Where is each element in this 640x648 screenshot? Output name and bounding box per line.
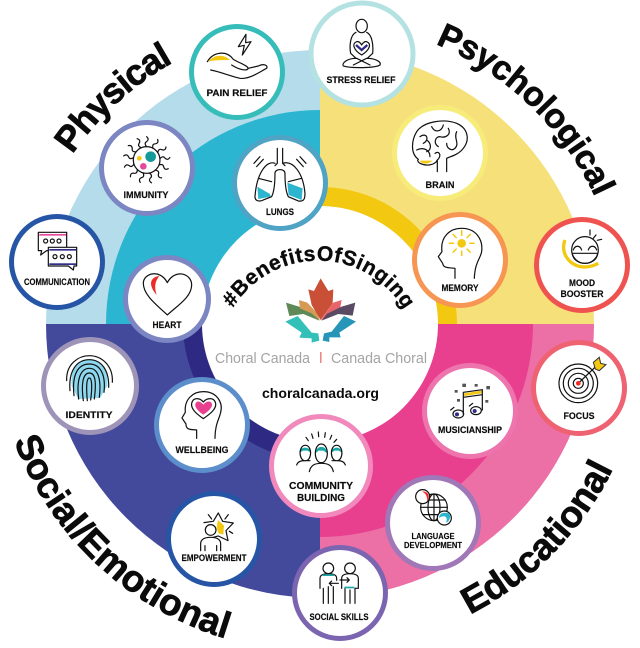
badge: Stress Relief [311,3,413,105]
badge: Focus [534,342,624,434]
badge: Community Building [272,416,370,516]
badge: Language Development: DEVELOPMENT [404,540,463,550]
quadrant: Educational [320,324,594,598]
badge: Focus: FOCUS [564,411,594,422]
badge: Lungs: LUNGS [266,207,294,218]
badge: Identity: IDENTITY [66,410,113,421]
badge: Community Building: COMMUNITY [289,480,353,492]
badge: Wellbeing [156,380,248,470]
badge: Communication [12,216,102,308]
heading: Educational: Educational [459,458,612,614]
icon: person with star [201,513,233,551]
badge: Pain Relief: PAIN RELIEF [206,88,268,99]
organisation name: Choral Canada [215,350,311,367]
hashtag heading: #BenefitsOfSinging [223,246,413,310]
heading: Physical: Physical [53,40,172,153]
icon: speech bubbles [38,232,77,270]
icon: hand with lightning bolt [207,34,267,78]
quadrant: Psychological [320,50,594,324]
badge: Musicianship: MUSICIANSHIP [438,425,503,436]
icon: globe with speech bubbles [416,490,451,525]
heading: Social/Emotional: Social/Emotional [16,434,232,638]
heading: Psychological: Psychological [437,23,617,196]
badge: Memory: MEMORY [442,283,479,294]
badge: Pain Relief [192,26,282,118]
icon: fingerprint [67,356,112,401]
icon: laughing face [564,230,602,267]
badge: Wellbeing: WELLBEING [176,445,228,456]
badge: Empowerment: EMPOWERMENT [182,553,247,564]
badge: Social Skills: SOCIAL SKILLS [310,612,368,623]
badge: Communication: COMMUNICATION [24,277,90,288]
website: choralcanada.org [262,385,379,401]
badge: Heart: HEART [152,320,182,331]
badge: Empowerment [168,494,260,584]
badge: Mood Booster [536,220,628,310]
badge: Heart [126,258,208,340]
badge: Language Development: LANGUAGE [412,531,455,541]
badge: Immunity: IMMUNITY [124,190,169,201]
badge: Language Development [388,478,478,568]
badge: Brain [394,108,486,198]
icon: virus cell [123,137,170,183]
logo: maple leaf [285,278,356,343]
badge: Mood Booster: BOOSTER [560,289,604,300]
icon: target and arrow [559,357,606,403]
badge: Lungs [234,138,326,228]
badge: Community Building: BUILDING [297,492,345,504]
icon: brain [412,121,467,172]
icon: lungs [254,148,306,201]
badge: Musicianship [424,366,516,456]
badge: Brain: BRAIN [426,180,455,191]
badge: Immunity [102,122,192,214]
badge: Memory [414,214,506,306]
badge: Stress Relief: STRESS RELIEF [326,75,396,86]
organisation name: Canada Choral [331,350,427,367]
icon: two people exchanging [320,563,358,603]
quadrant: Social/Emotional [46,324,320,598]
icon: head with spark [438,228,482,278]
quadrant: Physical [46,50,320,324]
badge: Social Skills [294,548,386,638]
icon: music notes [451,384,490,418]
icon: head with heart [182,392,221,438]
badge: Mood Booster: MOOD [569,278,595,289]
icon: meditating figure [343,19,380,68]
badge: Identity [44,340,136,432]
centre white disc [202,206,438,442]
organisation name [215,350,427,367]
icon: group of people [297,432,345,472]
icon: heart [143,274,192,315]
